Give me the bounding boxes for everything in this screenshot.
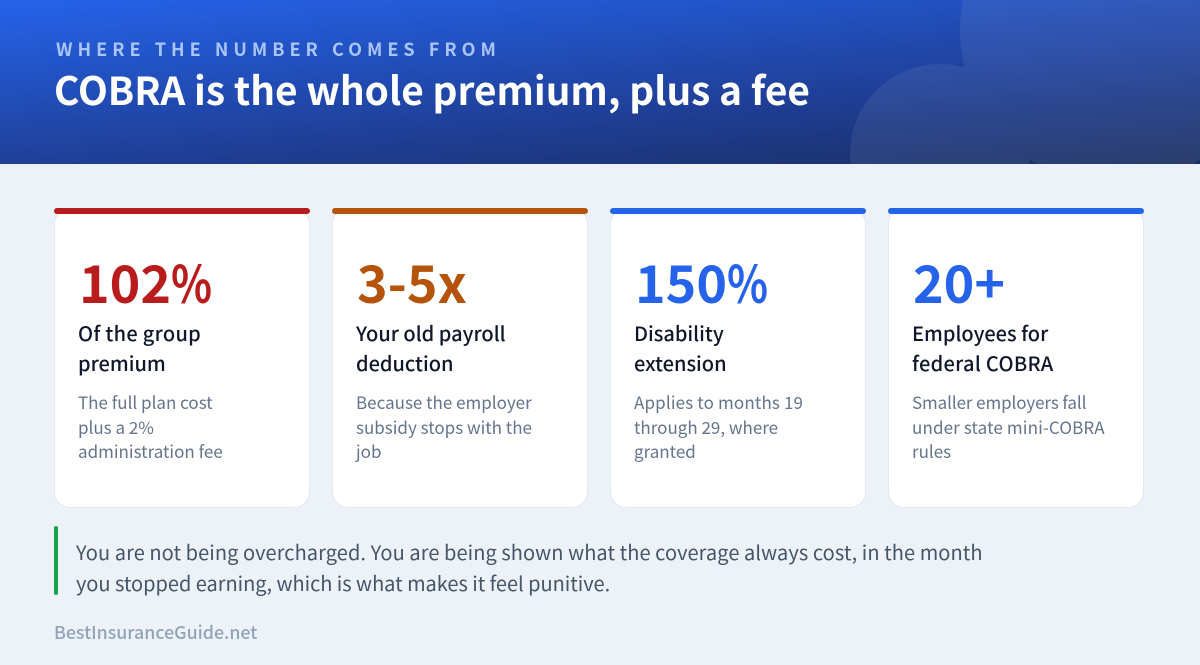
stat card: 150%: extension	[634, 348, 727, 377]
stat card: 20+: rules	[912, 438, 951, 463]
stat card: 150%: granted	[634, 438, 696, 463]
stat card: 150%: 150	[635, 243, 727, 318]
callout: you stopped earning, which is what makes it feel punitive.	[76, 568, 610, 596]
stat card: 3-5x: Because the employer	[356, 389, 532, 414]
stat card: 102%: Of the group	[78, 318, 201, 347]
header banner	[0, 0, 1200, 164]
stat card: 3-5x: subsidy stops with the	[356, 414, 532, 438]
title: COBRA is the whole premium, plus a fee	[54, 61, 810, 117]
stat card: 150%: Disability	[634, 318, 724, 347]
stat card: 20+: 20+	[913, 243, 1005, 318]
stat card: 3-5x: deduction	[356, 348, 454, 377]
stat card: 20+	[888, 208, 1144, 508]
stat card: 20+: Smaller employers fall	[912, 389, 1086, 414]
callout: You are not being overcharged. You are being shown what the coverage always cost, in the month	[76, 537, 983, 566]
stat card: 3-5x	[332, 208, 588, 508]
stat card: 102%: 102	[79, 243, 171, 318]
eyebrow: WHERE THE NUMBER COMES FROM	[56, 36, 501, 62]
stat card: 150%: through 29, where	[634, 414, 778, 438]
footer brand: BestInsuranceGuide.net	[54, 619, 257, 645]
stat card: 102%	[54, 208, 310, 508]
stat card: 20+: Employees for	[912, 318, 1048, 347]
callout	[54, 526, 983, 596]
stat card: 102%: %	[171, 243, 212, 318]
stat card: 102%: administration fee	[78, 438, 223, 463]
stat card: 150%: %	[727, 243, 768, 318]
stat card: 3-5x: Your old payroll	[356, 318, 506, 347]
stat card: 3-5x: job	[356, 438, 381, 463]
stat card: 20+: under state mini-COBRA	[912, 414, 1105, 438]
stat card: 20+: federal COBRA	[912, 348, 1054, 377]
stat card: 150%: Applies to months 19	[634, 389, 803, 414]
stat card: 150%	[610, 208, 866, 508]
stat card: 102%: premium	[78, 348, 166, 377]
stat card: 3-5x: 3-5x	[357, 243, 467, 318]
stat card: 102%: plus a 2%	[78, 414, 154, 438]
stat card: 102%: The full plan cost	[78, 389, 213, 414]
